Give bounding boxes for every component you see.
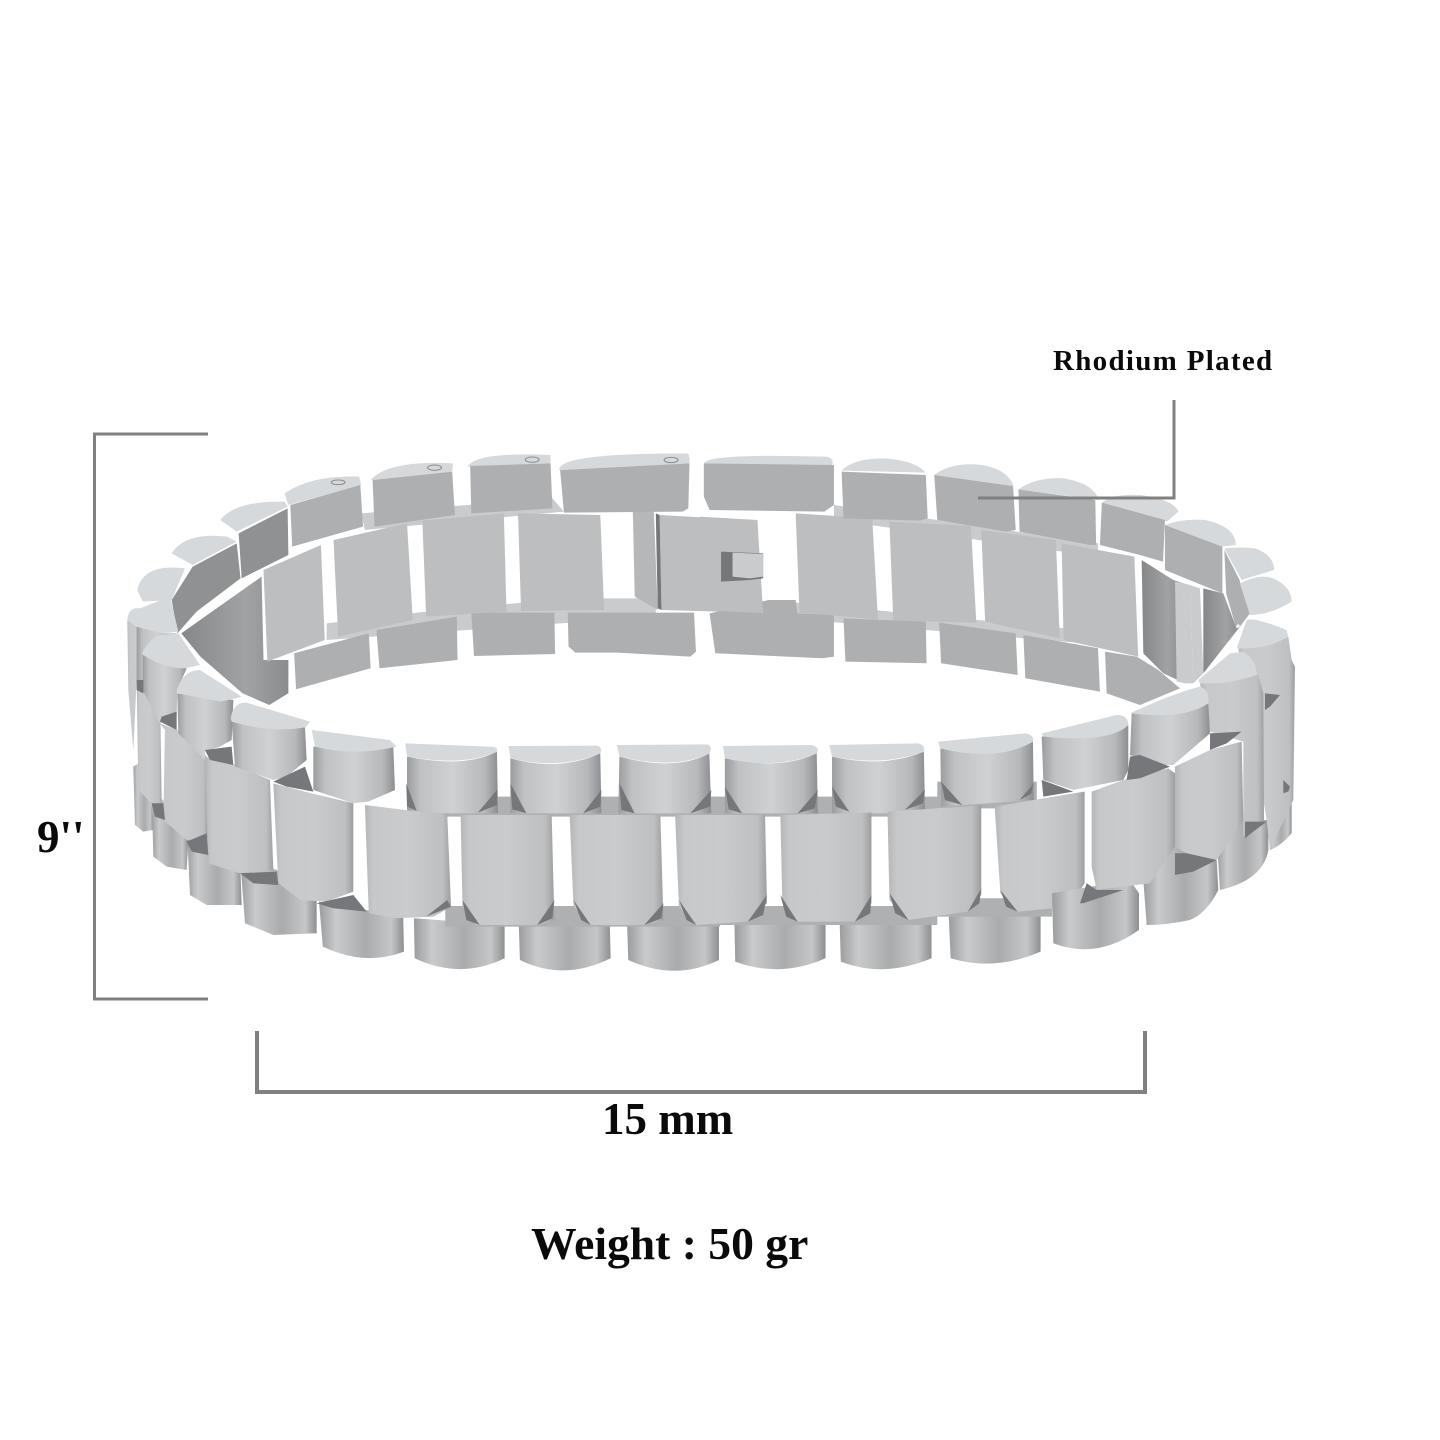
pins (331, 457, 678, 485)
back band, right half (700, 456, 1274, 692)
label: rhodium plated: Rhodium Plated (1053, 345, 1273, 377)
front band, centre right (675, 733, 1085, 969)
dimension: width bracket (257, 1031, 1145, 1092)
label: height: 9'' (37, 812, 85, 862)
label: weight: Weight : 50 gr (531, 1218, 808, 1269)
callout leader line (978, 400, 1174, 498)
label: width: 15 mm (602, 1094, 733, 1144)
front band, right side (1042, 577, 1295, 949)
front band, left side (127, 597, 397, 935)
dimension: height bracket (94, 434, 208, 999)
right side interior (1142, 560, 1240, 683)
bracelet (127, 453, 1295, 971)
front band, centre left (319, 743, 720, 971)
back band, left half (137, 453, 720, 705)
